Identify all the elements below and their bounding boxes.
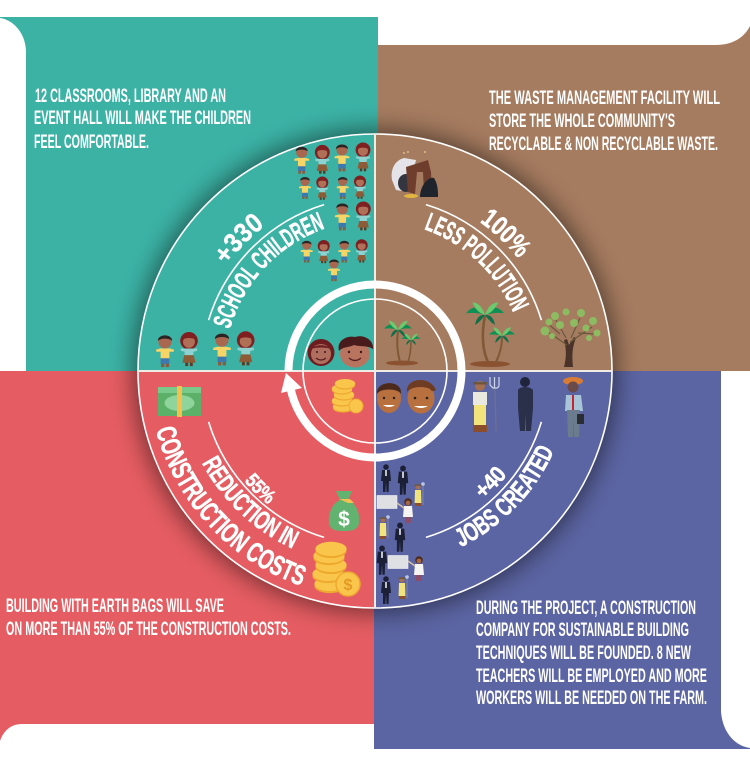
circular arrow — [281, 284, 461, 458]
curved label: +40 jobs created: +40 — [478, 466, 506, 496]
panel: jobs background — [374, 371, 750, 749]
icon: coin stack — [312, 542, 360, 596]
curved label: +330 school children: +330 — [217, 214, 262, 260]
icon: large palms — [466, 302, 515, 367]
icons: four children row — [156, 331, 254, 367]
curved label: 55% reduction in construction costs: CONSTRUCTION COSTS — [156, 426, 306, 585]
text block: jobs — [476, 598, 707, 709]
curved label: 55% reduction in construction costs: REDUCTION IN — [202, 454, 300, 549]
icon: boy face — [339, 336, 373, 368]
inner ring — [303, 299, 447, 443]
panel: school children background — [0, 17, 378, 371]
text block: school children: EVENT HALL WILL MAKE THE CHILDREN — [34, 108, 251, 129]
text block: school children: 12 CLASSROOMS, LIBRARY AND AN — [35, 86, 226, 107]
icon: farmer — [473, 377, 499, 432]
icon: money bag — [329, 491, 359, 531]
text block: construction costs — [6, 596, 291, 640]
icons: small workers group — [377, 464, 425, 604]
icon: coin stack: $ — [344, 577, 353, 594]
panel: construction costs background — [0, 371, 374, 741]
outer ring and cross lines — [138, 134, 612, 608]
text block: school children — [34, 86, 251, 153]
icon: cash bundle — [158, 386, 201, 417]
icon: blue faces — [377, 380, 436, 414]
icon: businessman — [563, 377, 584, 437]
icon: tree — [540, 308, 600, 367]
disc: four coloured quadrants — [138, 134, 612, 608]
icon: silhouette worker — [518, 377, 533, 431]
text block: construction costs: BUILDING WITH EARTH BAGS WILL SAVE — [6, 596, 224, 617]
text block: pollution — [489, 88, 720, 155]
curved label: 55% reduction in construction costs: 55% — [246, 472, 276, 504]
icon: waste pile — [392, 151, 438, 198]
circle shadow — [133, 129, 617, 613]
panel: pollution background — [378, 26, 750, 371]
arcs beside the curved labels — [209, 205, 541, 537]
icon: money bag: $ — [338, 508, 350, 531]
curved label: +40 jobs created: JOBS CREATED — [456, 446, 552, 546]
icon: small palms — [384, 321, 420, 366]
text block: construction costs: ON MORE THAN 55% OF THE CONSTRUCTION COSTS. — [6, 619, 291, 640]
curved label: 100% less pollution: 100% — [480, 210, 531, 258]
icon: centre coins — [332, 379, 363, 413]
icons: school children group — [294, 142, 371, 281]
text block: school children: FEEL COMFORTABLE. — [34, 132, 149, 153]
curved label: 100% less pollution: LESS POLLUTION — [424, 212, 530, 312]
icon: girl face — [308, 339, 334, 366]
curved label: +330 school children: SCHOOL CHILDREN — [214, 212, 324, 328]
